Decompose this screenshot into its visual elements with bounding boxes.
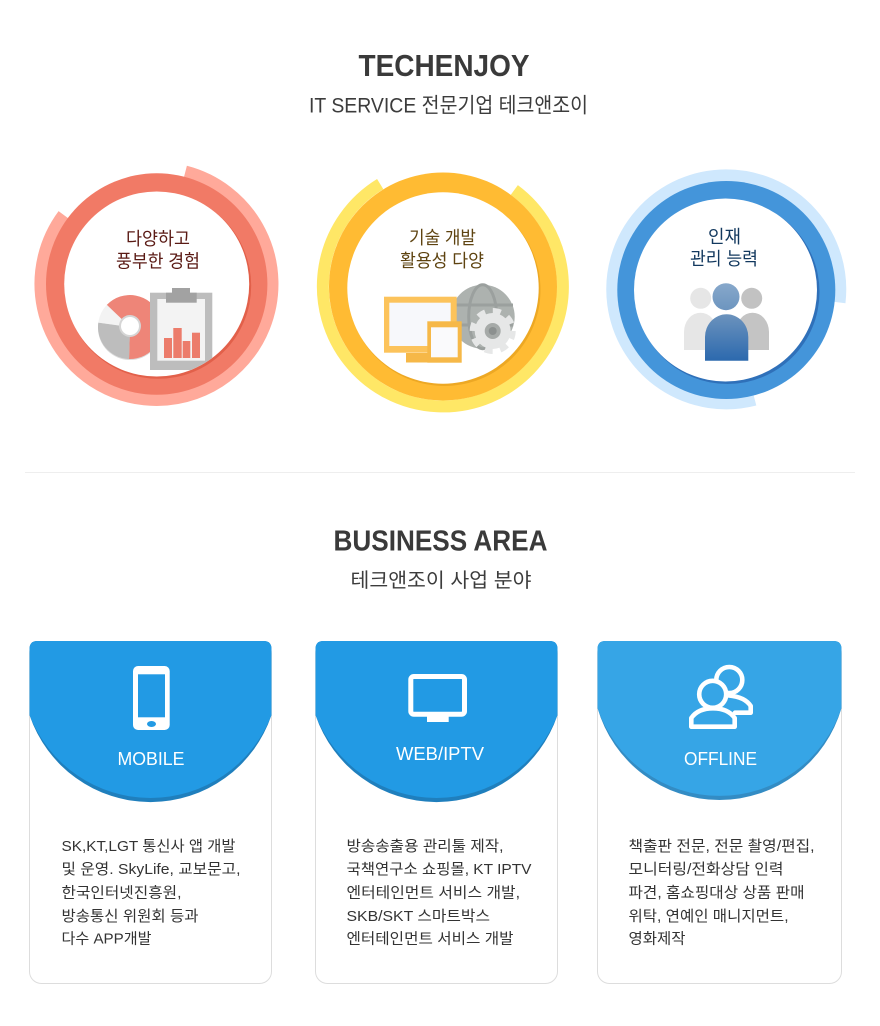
header: company (309, 48, 588, 118)
icon: smartphone (133, 666, 170, 730)
text: web and IPTV description: 엔터테인먼트 서비스 개발, (346, 884, 520, 902)
title: TECHENJOY: TECHENJOY (358, 48, 530, 83)
text: web and IPTV description: 방송송출용 관리툴 제작, (346, 838, 504, 855)
circle panel: technology development (323, 172, 563, 406)
heading: BUSINESS AREA: BUSINESS AREA (334, 526, 548, 558)
text: offline description: 위탁, 연예인 매니지먼트, (628, 908, 788, 925)
divider (25, 472, 855, 473)
label: talent management: 관리 능력 (690, 249, 758, 269)
subtitle: company description: IT SERVICE 전문기업 테크앤조이 (309, 94, 588, 118)
subtitle: business area description: 테크앤조이 사업 분야 (350, 569, 532, 592)
text: mobile description: 한국인터넷진흥원, (62, 884, 182, 902)
text: web and IPTV description: 국책연구소 쇼핑몰, KT IPTV (346, 861, 532, 878)
card: web and IPTV (316, 641, 558, 984)
label: WEB/IPTV: WEB/IPTV (396, 744, 484, 764)
card: offline (598, 641, 842, 984)
text: offline description: 파견, 홈쇼핑대상 상품 판매 (628, 884, 804, 902)
text: mobile description: 다수 APP개발 (62, 930, 152, 948)
label: MOBILE: MOBILE (118, 749, 184, 769)
text: web and IPTV description (346, 838, 532, 948)
text: offline description: 책출판 전문, 전문 촬영/편집, (628, 838, 814, 855)
text: mobile description (62, 838, 241, 948)
icon: pie chart and clipboard (98, 288, 212, 370)
label: OFFLINE: OFFLINE (684, 749, 757, 769)
text: mobile description: 방송통신 위원회 등과 (62, 908, 199, 925)
icon: three people (684, 283, 769, 361)
header: business area (334, 526, 548, 592)
circle panel: talent management (612, 175, 840, 403)
text: mobile description: SK,KT,LGT 통신사 앱 개발 (62, 838, 236, 855)
label: talent management: 인재 (708, 227, 741, 247)
label: technology development (400, 228, 484, 271)
icon: devices and globe gear (384, 285, 515, 363)
text: offline description (628, 838, 814, 948)
circle panel: varied experience (40, 172, 272, 400)
card: mobile (30, 641, 272, 984)
label: varied experience: 다양하고 (126, 229, 190, 249)
text: web and IPTV description: SKB/SKT 스마트박스 (346, 908, 490, 925)
text: offline description: 영화제작 (628, 930, 686, 948)
label: varied experience (116, 229, 200, 272)
label: talent management (690, 227, 758, 269)
icon: two people (691, 667, 751, 727)
text: web and IPTV description: 엔터테인먼트 서비스 개발 (346, 930, 514, 948)
text: offline description: 모니터링/전화상담 인력 (628, 861, 784, 878)
label: technology development: 활용성 다양 (400, 251, 484, 271)
label: varied experience: 풍부한 경험 (116, 252, 200, 272)
label: technology development: 기술 개발 (409, 228, 476, 248)
text: mobile description: 및 운영. SkyLife, 교보문고, (62, 861, 241, 878)
icon: monitor (411, 676, 464, 722)
